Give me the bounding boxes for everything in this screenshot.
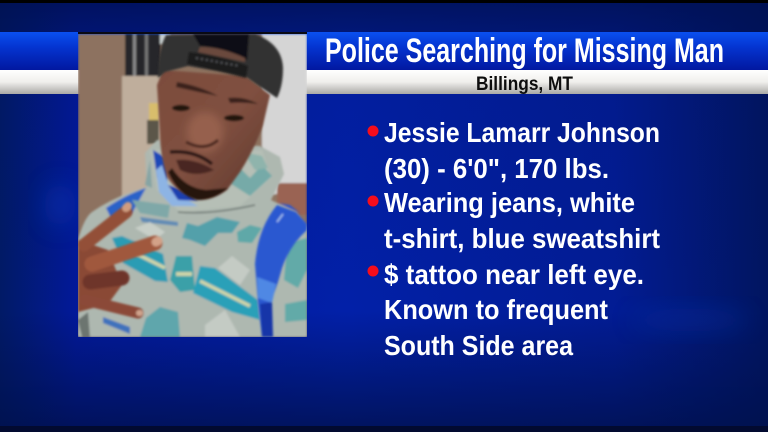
header bar: blue band bbox=[0, 32, 768, 70]
bullet 2: t-shirt, blue sweatshirt bbox=[384, 223, 660, 254]
backward cap bbox=[158, 34, 283, 98]
hood drawstring seam bbox=[178, 205, 255, 213]
bullet 1: (30) - 6'0", 170 lbs. bbox=[384, 153, 609, 184]
photo of missing man bbox=[78, 34, 307, 337]
bullet 2 bbox=[368, 187, 660, 254]
face bbox=[157, 70, 270, 200]
bullet 3: South Side area bbox=[384, 330, 573, 361]
inner collar and shirt bbox=[152, 150, 168, 182]
bullet 3: Known to frequent bbox=[384, 294, 608, 325]
bullet list bbox=[368, 117, 660, 361]
bullet 1 bbox=[368, 117, 660, 184]
photo top edge bbox=[78, 32, 307, 34]
backpack strap bbox=[255, 205, 307, 337]
outlined diamond shapes bbox=[218, 256, 250, 285]
hoodie bbox=[78, 140, 307, 337]
bullet 3 bbox=[368, 259, 644, 361]
photo background: building and sky bbox=[78, 34, 307, 337]
bullet 2: Wearing jeans, white bbox=[384, 187, 635, 218]
bullet 1: Jessie Lamarr Johnson bbox=[384, 117, 660, 148]
main teal band bbox=[112, 236, 168, 282]
hand with fingers bbox=[78, 206, 158, 313]
location subtitle: Billings, MT bbox=[476, 73, 573, 95]
lower motifs bbox=[140, 307, 180, 337]
chest motifs bbox=[182, 217, 240, 246]
hood pattern bbox=[231, 168, 272, 196]
header bar: white band bbox=[0, 70, 768, 94]
bullet 3: $ tattoo near left eye. bbox=[384, 259, 644, 290]
